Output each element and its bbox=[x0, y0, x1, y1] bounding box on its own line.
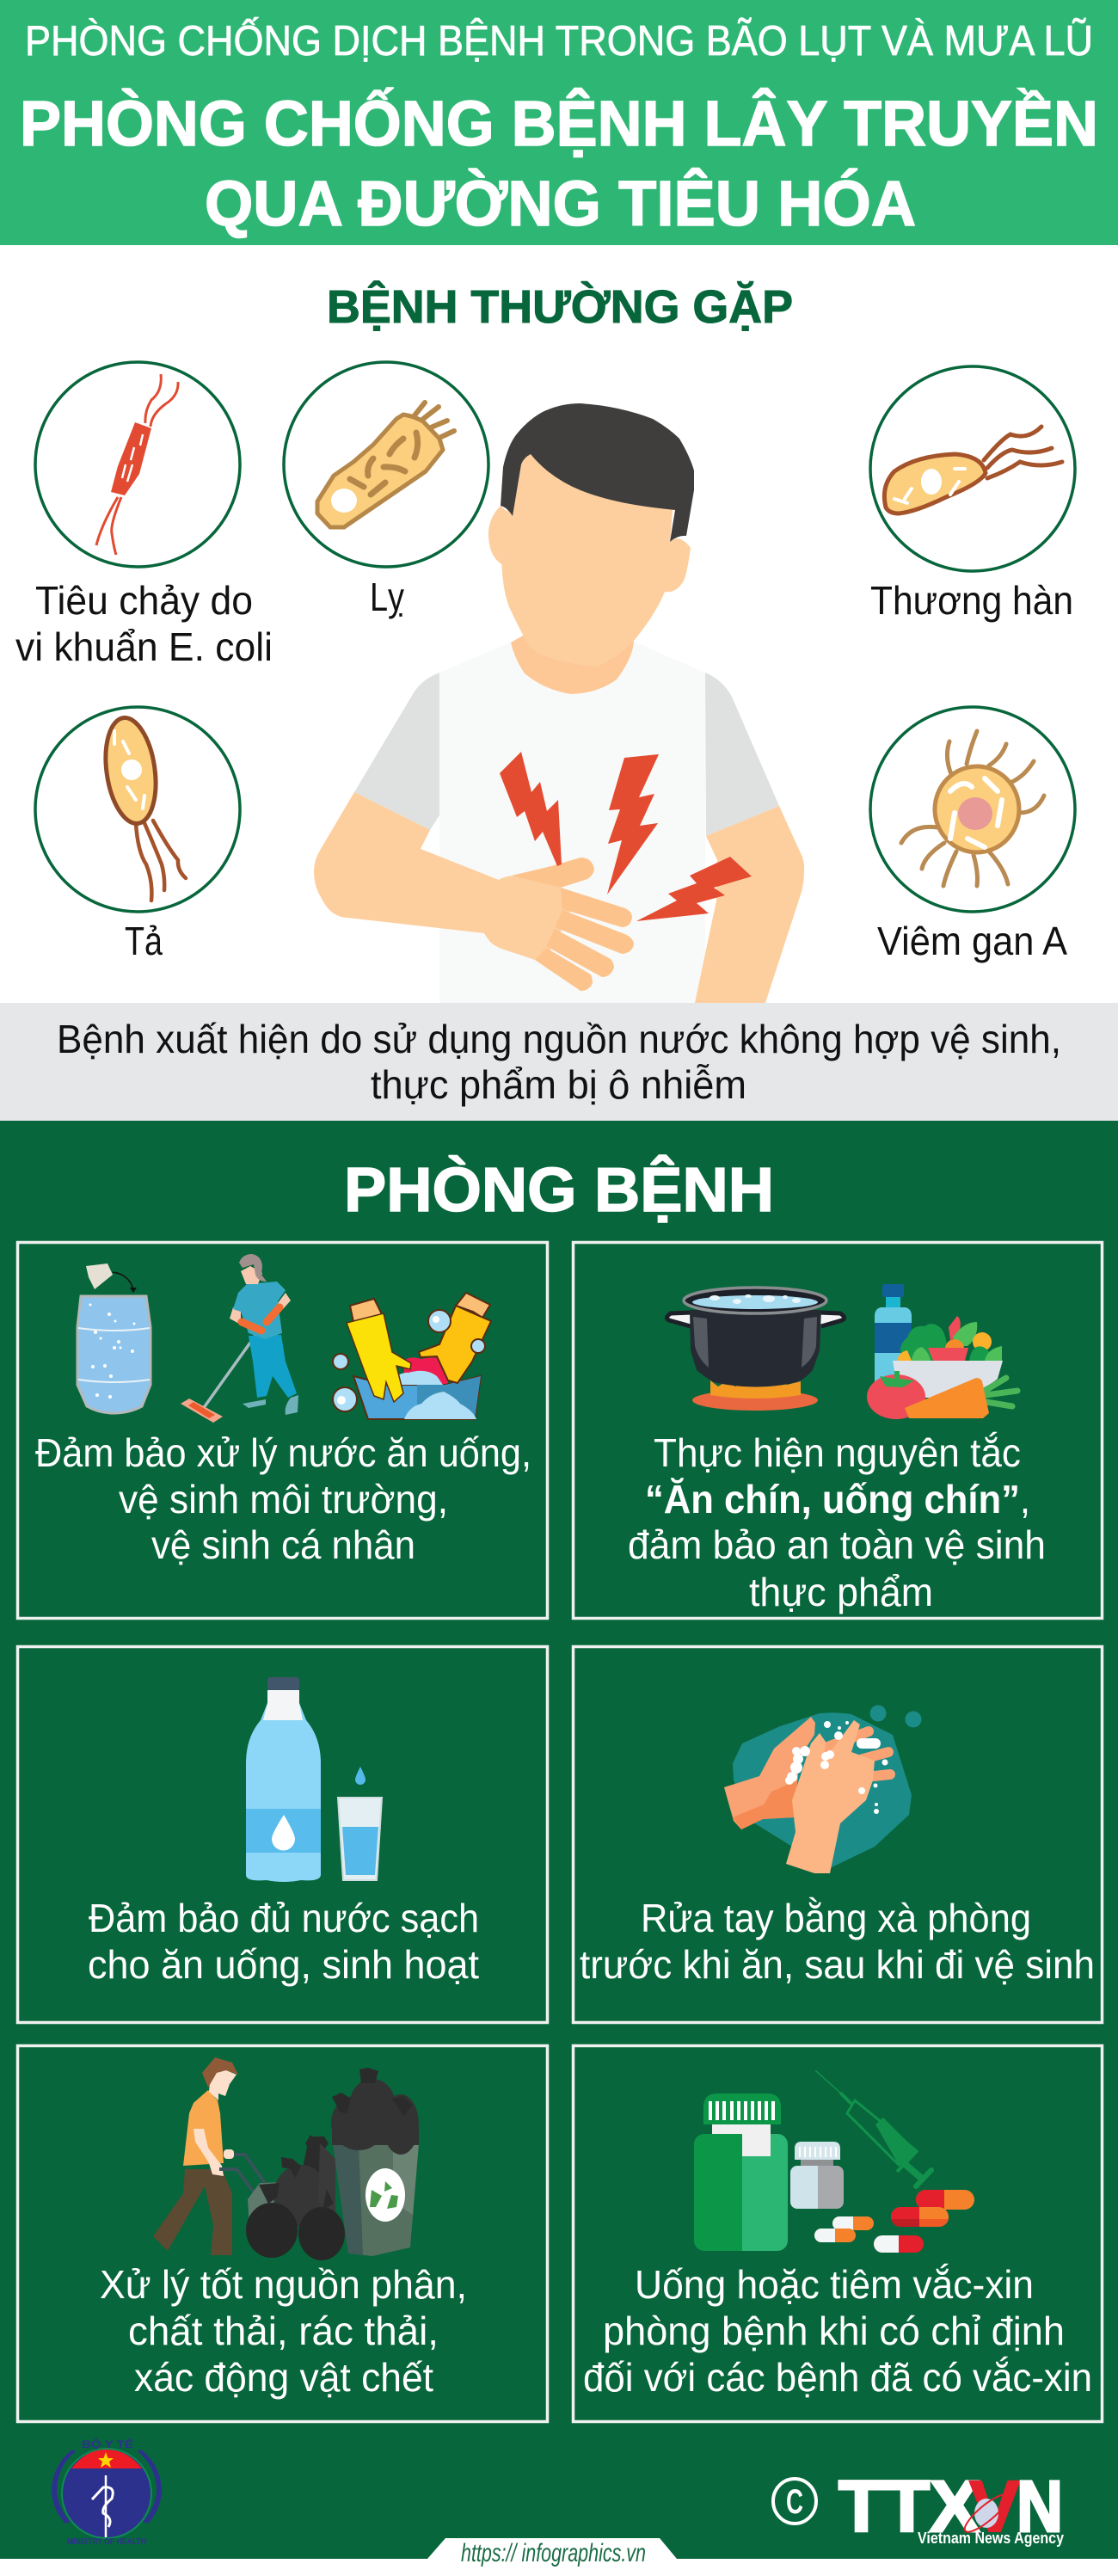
panel text: Đảm bảo đủ nước sạch bbox=[89, 1896, 479, 1940]
virus bbox=[901, 731, 1044, 886]
copyright symbol: C bbox=[786, 2483, 803, 2521]
panel text: Xử lý tốt nguồn phân, bbox=[100, 2262, 467, 2307]
capsule red orange bbox=[916, 2190, 974, 2210]
panel: vaccines bbox=[573, 2045, 1103, 2422]
capsule white red bbox=[874, 2235, 924, 2253]
heading: common diseases: BỆNH THƯỜNG GẶP bbox=[327, 280, 793, 333]
letter V: V bbox=[969, 2466, 1020, 2547]
icon: syringe bbox=[815, 2070, 931, 2186]
icon: cleaner with mop bbox=[181, 1254, 298, 1423]
capsule red orange front bbox=[891, 2207, 949, 2227]
panel text line 2: vệ sinh môi trường, bbox=[119, 1477, 448, 1522]
header band bbox=[0, 0, 1118, 245]
icon: water barrel bbox=[77, 1263, 150, 1413]
label: Tả bbox=[125, 919, 163, 963]
bacterium bbox=[100, 715, 186, 901]
panel text line 2: cho ăn uống, sinh hoạt bbox=[88, 1942, 479, 1987]
prevention section background bbox=[0, 1121, 1118, 2559]
left arm and hand bbox=[314, 792, 573, 960]
left sleeve bbox=[354, 673, 439, 830]
panel text: Rửa tay bằng xà phòng bbox=[641, 1896, 1031, 1940]
man with stomach ache bbox=[314, 403, 804, 1003]
pain bolt 2 bbox=[607, 754, 659, 895]
title line 2: QUA ĐƯỜNG TIÊU HÓA bbox=[205, 168, 916, 239]
panel: water and hygiene bbox=[17, 1242, 547, 1619]
logo: Ministry of Health bbox=[52, 2438, 162, 2547]
icon: small medicine bottle bbox=[790, 2142, 844, 2209]
panel: hand washing bbox=[573, 1646, 1103, 2023]
left ear bbox=[488, 506, 516, 564]
logo: Ministry of Health: MINISTRY OF HEALTH bbox=[67, 2537, 146, 2547]
icon: glass of water bbox=[338, 1767, 382, 1880]
icon: washing hands bbox=[724, 1705, 922, 1873]
circle bbox=[870, 707, 1075, 912]
pain bolt 1 bbox=[500, 752, 562, 866]
bacterium bbox=[884, 427, 1062, 513]
panel text line 3: đối với các bệnh đã có vắc-xin bbox=[583, 2355, 1092, 2400]
disease: E. coli diarrhea bbox=[15, 362, 273, 669]
label: Tiêu chảy do bbox=[35, 578, 253, 623]
heading: prevention: PHÒNG BỆNH bbox=[344, 1155, 774, 1225]
copyright symbol bbox=[773, 2479, 816, 2524]
panel: waste handling bbox=[17, 2045, 547, 2422]
label: Thương hàn bbox=[870, 578, 1073, 623]
shirt bbox=[439, 642, 705, 1003]
letter N: N bbox=[1017, 2466, 1063, 2547]
icon: gloves and basin bbox=[333, 1293, 491, 1419]
label: Viêm gan A bbox=[877, 919, 1067, 963]
panel text line 3: vệ sinh cá nhân bbox=[151, 1522, 415, 1567]
globe bbox=[961, 2490, 1012, 2536]
face bbox=[501, 447, 675, 667]
footer strip and url tab bbox=[0, 2538, 1118, 2576]
panel: cooked food bbox=[573, 1242, 1103, 1619]
panel text line 4: thực phẩm bbox=[749, 1570, 933, 1614]
panel text: Thực hiện nguyên tắc bbox=[654, 1430, 1021, 1475]
panel text bold: “Ăn chín, uống chín”, bbox=[645, 1477, 1030, 1522]
logo: TTXVN bbox=[838, 2466, 1064, 2547]
panel text line 3: xác động vật chết bbox=[134, 2355, 433, 2400]
capsule white orange front bbox=[814, 2229, 856, 2242]
letters TTX: TTX bbox=[838, 2466, 980, 2547]
capsule white orange bbox=[832, 2216, 874, 2230]
title line 1: PHÒNG CHỐNG BỆNH LÂY TRUYỀN bbox=[20, 88, 1098, 159]
icon: capsules bbox=[814, 2190, 974, 2253]
icon: garbage bags and bin bbox=[246, 2068, 419, 2260]
label: Lỵ bbox=[370, 575, 404, 619]
icon: water bottle bbox=[246, 1677, 321, 1882]
panel text line 2: phòng bệnh khi có chỉ định bbox=[603, 2309, 1065, 2353]
cause line 2: thực phẩm bị ô nhiễm bbox=[371, 1062, 746, 1107]
circle bbox=[284, 362, 488, 567]
logo: Ministry of Health: BỘ Y TẾ bbox=[82, 2438, 133, 2450]
disease: hepatitis A bbox=[870, 707, 1075, 963]
circle bbox=[35, 362, 240, 567]
panel text: Đảm bảo xử lý nước ăn uống, bbox=[35, 1430, 531, 1475]
pain bolt 3 bbox=[636, 857, 752, 921]
panel text line 2: trước khi ăn, sau khi đi vệ sinh bbox=[580, 1942, 1095, 1987]
panel text line 3: đảm bảo an toàn vệ sinh bbox=[628, 1522, 1046, 1567]
icon: large medicine bottle bbox=[694, 2093, 788, 2251]
neck bbox=[511, 636, 634, 694]
cause band bbox=[0, 1003, 1118, 1121]
fingers bbox=[512, 858, 634, 991]
circle bbox=[870, 366, 1075, 571]
icon: bottle and vegetables bbox=[867, 1284, 1017, 1419]
disease: cholera bbox=[35, 707, 240, 963]
bacterium bbox=[317, 403, 454, 527]
disease: dysentery bbox=[284, 362, 488, 619]
icon: man with cart bbox=[153, 2057, 265, 2255]
panel text line 2: chất thải, rác thải, bbox=[128, 2309, 439, 2353]
panel text: Uống hoặc tiêm vắc-xin bbox=[635, 2262, 1034, 2307]
icon: boiling pot bbox=[666, 1288, 845, 1411]
bacterium bbox=[96, 374, 178, 555]
label line 2: vi khuẩn E. coli bbox=[15, 624, 273, 669]
disease: typhoid bbox=[870, 366, 1075, 623]
right arm bbox=[695, 806, 804, 1003]
url: https:// infographics.vn bbox=[461, 2539, 646, 2567]
circle bbox=[35, 707, 240, 912]
agency name: Vietnam News Agency bbox=[918, 2530, 1064, 2547]
right sleeve bbox=[705, 673, 779, 836]
hair bbox=[501, 403, 694, 542]
panel: clean water bbox=[17, 1646, 547, 2023]
right ear bbox=[658, 538, 691, 592]
cause line 1: Bệnh xuất hiện do sử dụng nguồn nước không hợp vệ sinh, bbox=[57, 1017, 1061, 1061]
